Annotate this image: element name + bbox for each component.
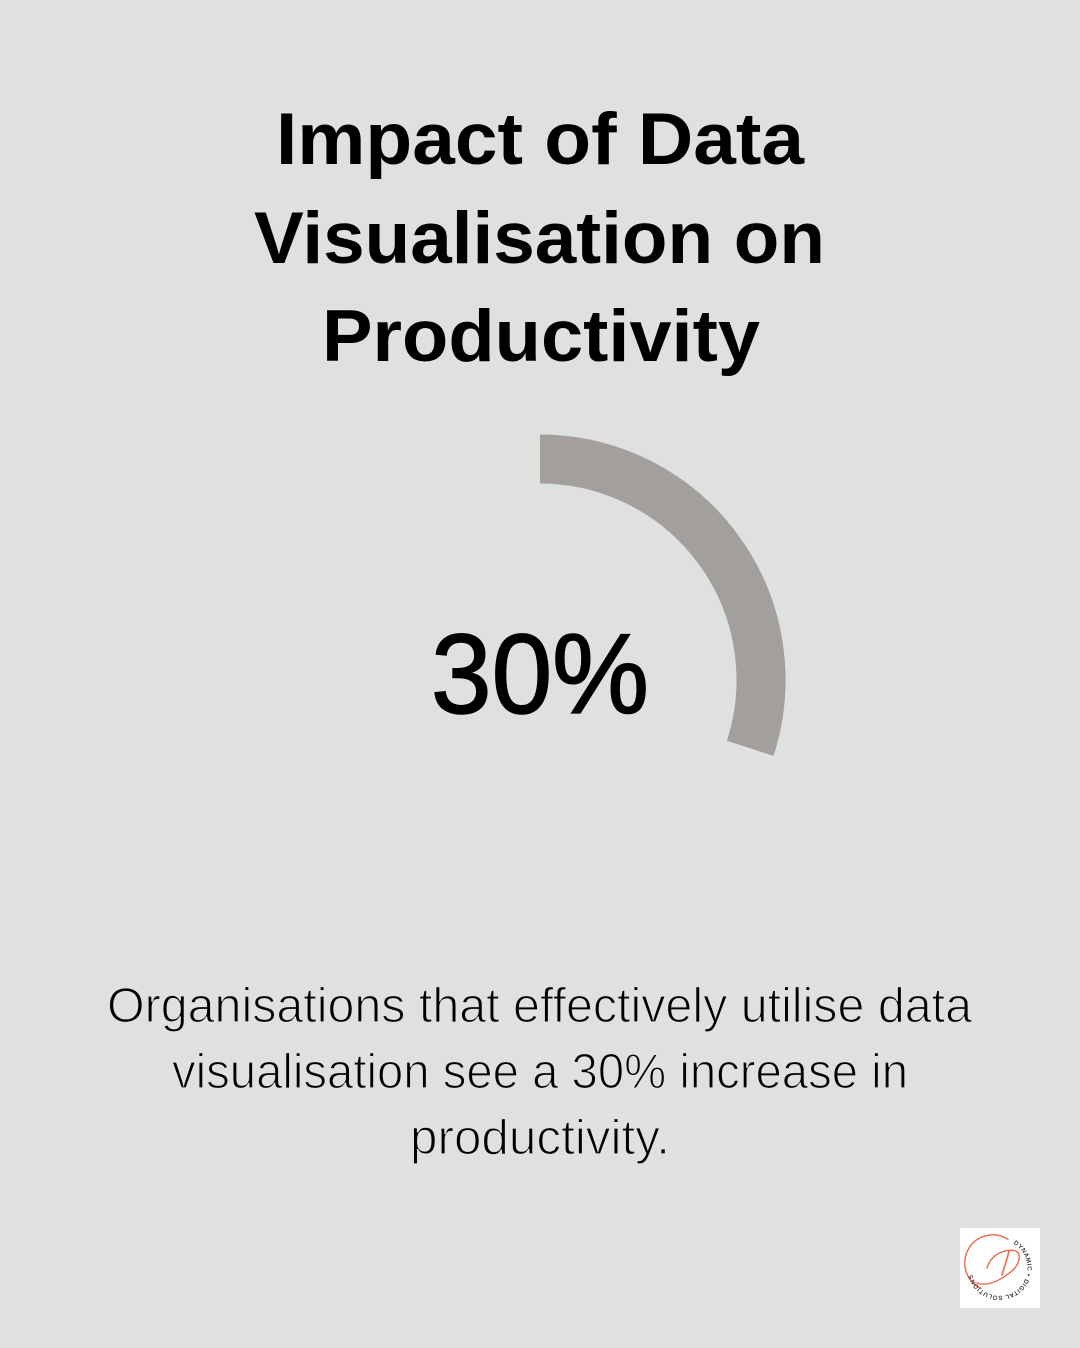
description text: visualisation see a 30% increase in <box>172 1045 908 1099</box>
donut track <box>319 459 761 901</box>
title <box>254 99 825 377</box>
logo ring and script mark <box>965 1235 1019 1288</box>
donut value label: 30% <box>431 611 649 737</box>
description text <box>107 979 973 1165</box>
description text: Organisations that effectively utilise data <box>107 979 973 1033</box>
title: Visualisation on <box>254 198 825 279</box>
logo badge <box>960 1228 1040 1308</box>
description text: productivity. <box>410 1111 670 1165</box>
title: Productivity <box>322 296 760 377</box>
donut chart: 30% <box>319 459 761 901</box>
logo circular text: DYNAMIC • DIGITAL SOLUTIONS <box>968 1240 1032 1300</box>
title: Impact of Data <box>276 99 805 180</box>
donut value arc <box>540 459 761 748</box>
